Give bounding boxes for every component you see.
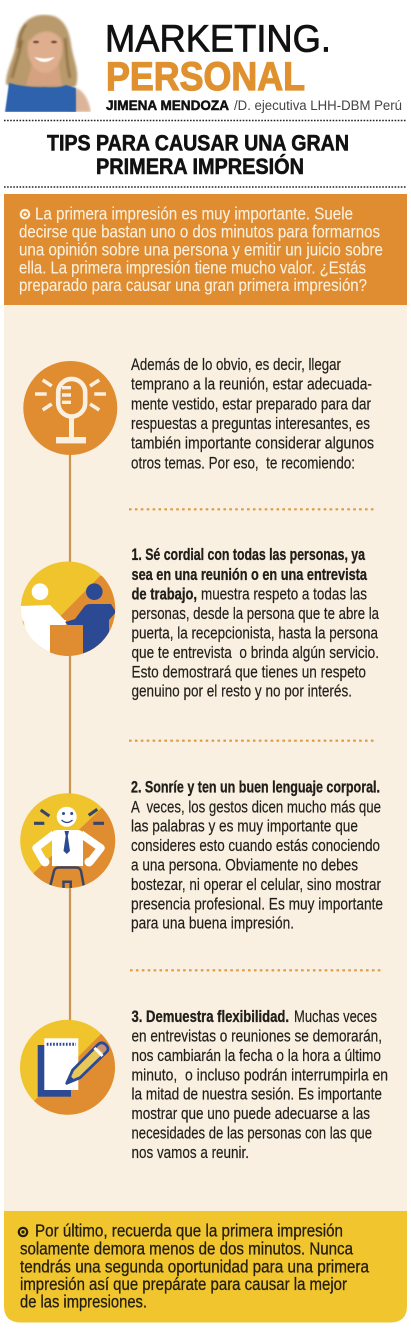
main heading: TIPS PARA CAUSAR UNA GRAN bbox=[47, 131, 349, 156]
text block: introduction: otros temas. Por eso, te recomiendo: bbox=[131, 454, 355, 472]
author credit: /D. ejecutiva LHH-DBM Perú bbox=[234, 98, 402, 113]
closing text: de las impresiones. bbox=[20, 1291, 147, 1311]
text block: tip 3: 3. Demuestra flexibilidad. bbox=[132, 1008, 289, 1026]
text block: tip 2: a una persona. Obviamente no debes bbox=[131, 856, 358, 874]
text block: tip 3: Muchas veces bbox=[294, 1008, 377, 1026]
icon: notepad and pencil bbox=[20, 1019, 116, 1115]
text block: tip 1: genuino por el resto y no por interés. bbox=[132, 683, 352, 701]
closing text: Por último, recuerda que la primera impresión bbox=[35, 1221, 343, 1241]
author credit: JIMENA MENDOZA bbox=[106, 98, 229, 113]
closing text: solamente demora menos de dos minutos. Nunca bbox=[20, 1238, 353, 1258]
closing text: impresión así que prepárate para causar la mejor bbox=[20, 1274, 347, 1294]
panel: tips background bbox=[4, 305, 407, 1211]
text block: introduction: Además de lo obvio, es decir, llegar bbox=[131, 356, 341, 374]
header title: Personal: PERSONAL bbox=[106, 55, 305, 99]
icon: closing bullet bbox=[19, 1228, 27, 1236]
text block: tip 2: para una buena impresión. bbox=[131, 915, 294, 933]
intro text bbox=[19, 204, 383, 295]
author credit bbox=[106, 98, 402, 113]
icon: microphone bbox=[23, 361, 117, 455]
text block: introduction: temprano a la reunión, estar adecuada- bbox=[131, 376, 372, 394]
main heading: PRIMERA IMPRESIÓN bbox=[96, 154, 304, 179]
panel: intro bbox=[4, 194, 407, 305]
closing text bbox=[20, 1221, 369, 1311]
text block: tip 3 bbox=[132, 1008, 388, 1162]
icon: smiling man bbox=[20, 793, 116, 889]
text block: tip 3: nos vamos a reunir. bbox=[132, 1144, 249, 1162]
panel: closing note bbox=[4, 1211, 407, 1322]
text block: introduction: también importante considerar algunos bbox=[131, 435, 374, 453]
text block: introduction bbox=[131, 356, 374, 472]
closing text: tendrás una segunda oportunidad para una primera bbox=[20, 1256, 369, 1276]
author portrait bbox=[5, 15, 91, 112]
text block: tip 1: Esto demostrará que tienes un respeto bbox=[132, 663, 366, 681]
text block: tip 1: muestra respeto a todas las bbox=[201, 586, 367, 604]
text block: tip 2 bbox=[131, 779, 383, 933]
timeline connector bbox=[69, 450, 71, 1024]
header title: Marketing: MARKETING. bbox=[105, 19, 331, 61]
icon: two people meeting at a desk bbox=[19, 561, 116, 657]
intro text: preparado para causar una gran primera impresión? bbox=[19, 275, 367, 295]
icon: intro bullet bbox=[21, 210, 29, 218]
text block: tip 2: las palabras y es muy importante que bbox=[131, 818, 358, 836]
intro text: La primera impresión es muy importante. Suele bbox=[35, 204, 353, 224]
text block: tip 1 bbox=[132, 546, 380, 701]
main heading bbox=[47, 131, 349, 179]
text block: tip 1: de trabajo, bbox=[132, 586, 197, 604]
